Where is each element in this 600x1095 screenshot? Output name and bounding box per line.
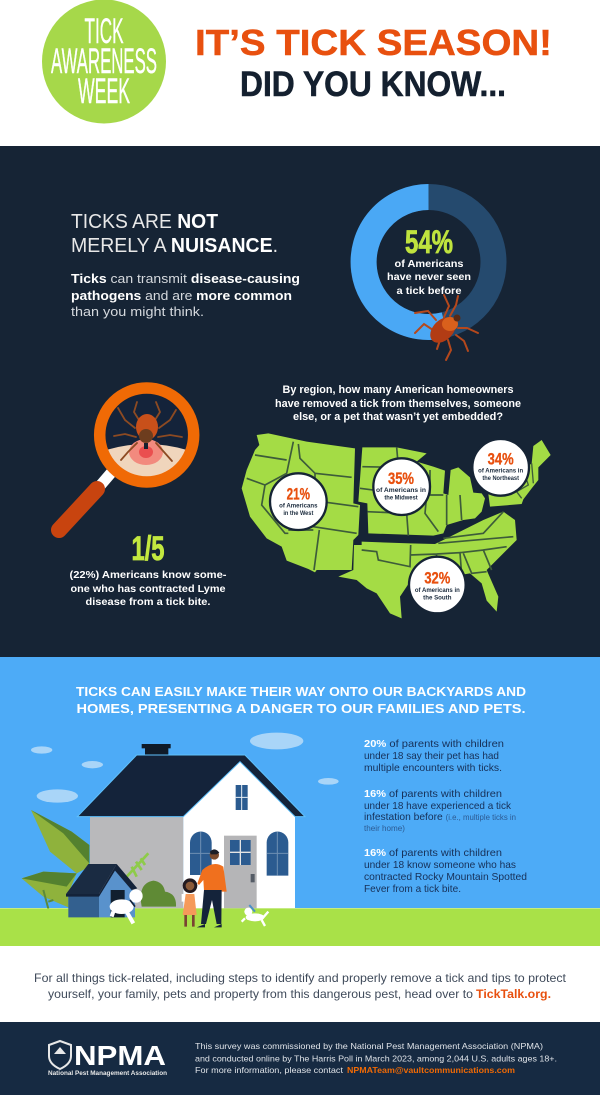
callout: Midwest 35% bbox=[373, 458, 430, 515]
panel: call to action: For all things tick-related, including steps to identify and properly remove a tick and tips to protect bbox=[34, 971, 567, 985]
callout: West 21%: in the West bbox=[283, 511, 313, 517]
panel: header bbox=[0, 0, 600, 146]
donut chart: 54 percent: a tick before bbox=[396, 286, 462, 297]
heading: backyards: TICKS CAN EASILY MAKE THEIR WAY ONTO OUR BACKYARDS AND bbox=[76, 685, 526, 699]
map question bbox=[275, 384, 521, 423]
statistic: 1 in 5 bbox=[70, 530, 227, 608]
icon: magnifying glass with tick bbox=[59, 388, 194, 530]
panel: call to action bbox=[0, 946, 600, 1022]
text block: pathogens: pathogens and are more common bbox=[71, 288, 292, 303]
tick in glass bbox=[114, 402, 182, 461]
statistic: 16 percent spotted fever: contracted Rocky Mountain Spotted bbox=[364, 871, 527, 883]
ground bbox=[0, 908, 600, 947]
bush bbox=[141, 881, 176, 907]
region: Northeast bbox=[488, 440, 551, 507]
icon: tick on donut bbox=[415, 295, 478, 360]
chimney bbox=[142, 744, 171, 772]
clouds bbox=[31, 733, 339, 803]
link: TickTalk.org: TickTalk.org. bbox=[476, 987, 551, 1001]
survey note: This survey was commissioned by the National Pest Management Association (NPMA) bbox=[195, 1041, 543, 1051]
statistic: 1 in 5: one who has contracted Lyme bbox=[70, 583, 226, 595]
roof bbox=[77, 755, 305, 817]
survey note bbox=[195, 1041, 557, 1075]
text block: pathogens: Ticks can transmit disease-causing bbox=[71, 271, 300, 286]
statistic: 16 percent spotted fever bbox=[364, 847, 527, 895]
callout: West 21% bbox=[270, 473, 327, 530]
statistic: 16 percent spotted fever: 16% of parents with children bbox=[364, 847, 502, 859]
logo: NPMA: National Pest Management Association bbox=[48, 1070, 167, 1077]
region: South bbox=[338, 512, 517, 618]
statistic: 1 in 5: 1/5 bbox=[132, 530, 164, 568]
doghouse bbox=[66, 864, 137, 917]
skin bbox=[106, 444, 187, 481]
heading: not merely a nuisance: MERELY A NUISANCE. bbox=[71, 235, 278, 257]
door bbox=[224, 836, 257, 908]
donut chart: 54 percent: have never seen bbox=[387, 272, 471, 283]
logo: NPMA bbox=[48, 1040, 167, 1077]
callout: Midwest 35%: of Americans in bbox=[376, 488, 426, 494]
logo: NPMA: NPMA bbox=[74, 1040, 166, 1071]
callout: South 32% bbox=[409, 557, 466, 613]
handle bbox=[59, 473, 111, 530]
statistic: 20 percent pets bbox=[364, 738, 504, 774]
statistic: 1 in 5: (22%) Americans know some- bbox=[70, 569, 227, 581]
house bbox=[77, 744, 305, 908]
statistic: 16 percent infestation bbox=[364, 788, 516, 833]
statistic: 20 percent pets: under 18 say their pet has had bbox=[364, 750, 499, 762]
panel: call to action: yourself, your family, pets and property from this dangerous pest, head over to bbox=[48, 987, 473, 1001]
survey note: and conducted online by The Harris Poll in March 2023, among 2,044 U.S. adults ages 18+. bbox=[195, 1054, 557, 1064]
callout: West 21%: 21% bbox=[287, 484, 310, 503]
arched windows bbox=[190, 831, 288, 876]
leaves bbox=[22, 810, 89, 915]
callout: South 32%: the South bbox=[423, 595, 452, 601]
callout: South 32%: 32% bbox=[424, 568, 450, 587]
map question: have removed a tick from themselves, someone bbox=[275, 398, 521, 410]
panel: ticks are not merely a nuisance bbox=[0, 146, 600, 657]
donut chart: 54 percent bbox=[364, 197, 494, 327]
badge: Tick Awareness Week bbox=[42, 0, 166, 124]
statistic: 16 percent spotted fever: Fever from a tick bite. bbox=[364, 883, 461, 895]
statistic: 16 percent infestation: 16% of parents with children bbox=[364, 788, 502, 800]
panel: backyards and homes bbox=[0, 657, 600, 947]
icon: shield bbox=[49, 1041, 71, 1069]
donut chart: 54 percent: 54% bbox=[405, 224, 453, 260]
small dog bbox=[242, 905, 268, 926]
man bbox=[197, 849, 227, 927]
callout: West 21%: of Americans bbox=[279, 503, 318, 509]
callout: Northeast 34%: the Northeast bbox=[482, 476, 519, 482]
donut chart: 54 percent: of Americans bbox=[394, 259, 464, 270]
girl bbox=[182, 878, 198, 927]
map question: else, or a pet that wasn’t yet embedded? bbox=[293, 411, 503, 423]
illustration: house, family and pets bbox=[0, 733, 600, 947]
heading: backyards bbox=[76, 685, 526, 716]
vine bbox=[127, 853, 148, 877]
statistic: 16 percent infestation: under 18 have experienced a tick bbox=[364, 800, 512, 812]
callout: Midwest 35%: 35% bbox=[388, 469, 414, 488]
survey note: For more information, please contact bbox=[195, 1065, 344, 1075]
callout: Northeast 34%: of Americans in bbox=[478, 469, 523, 475]
region: Midwest bbox=[358, 447, 485, 536]
statistic: 20 percent pets: 20% of parents with children bbox=[364, 738, 504, 750]
statistic: 20 percent pets: multiple encounters with ticks. bbox=[364, 762, 502, 774]
heading: not merely a nuisance: TICKS ARE NOT bbox=[71, 211, 218, 233]
badge: Tick Awareness Week: AWARENESS bbox=[51, 42, 157, 81]
badge: Tick Awareness Week: WEEK bbox=[78, 72, 130, 111]
title: IT’S TICK SEASON! bbox=[195, 22, 552, 63]
callout: Northeast 34% bbox=[472, 439, 529, 496]
callout: Northeast 34%: 34% bbox=[488, 449, 514, 468]
statistic: 16 percent spotted fever: under 18 know someone who has bbox=[364, 859, 516, 871]
subtitle: DID YOU KNOW... bbox=[240, 65, 506, 104]
dog bbox=[110, 889, 143, 923]
heading: backyards: HOMES, PRESENTING A DANGER TO OUR FAMILIES AND PETS. bbox=[76, 702, 526, 716]
map: United States regions bbox=[242, 433, 551, 618]
statistic: 16 percent infestation: their home) bbox=[364, 824, 405, 833]
panel: footer bbox=[0, 1022, 600, 1095]
callout: Midwest 35%: the Midwest bbox=[384, 495, 418, 501]
text block: pathogens bbox=[71, 271, 300, 319]
heading: not merely a nuisance bbox=[71, 211, 278, 257]
map question: By region, how many American homeowners bbox=[282, 384, 514, 396]
badge: Tick Awareness Week: TICK bbox=[84, 12, 124, 51]
callout: South 32%: of Americans in bbox=[415, 588, 460, 594]
statistic: 16 percent infestation: infestation before (i.e., multiple ticks in bbox=[364, 811, 516, 823]
text block: pathogens: than you might think. bbox=[71, 304, 204, 319]
statistic: 1 in 5: disease from a tick bite. bbox=[86, 596, 211, 608]
attic window bbox=[236, 785, 248, 810]
region: West bbox=[242, 433, 360, 572]
survey note: NPMATeam@vaultcommunications.com bbox=[347, 1065, 515, 1075]
